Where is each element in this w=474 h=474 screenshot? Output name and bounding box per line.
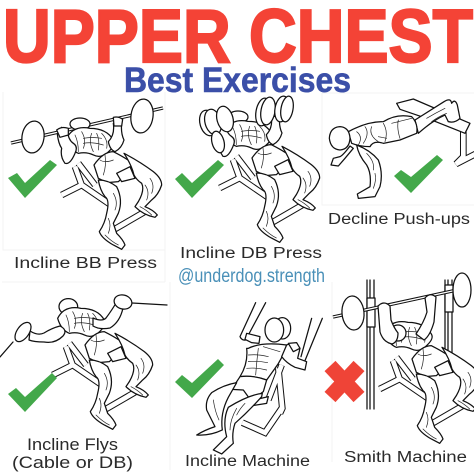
label: Decline Push-ups [328, 211, 470, 228]
illustration: smith machine press [333, 273, 474, 443]
subtitle: Best Exercises [124, 61, 351, 100]
panel: incline dumbbell press [175, 95, 325, 287]
label: Smith Machine [344, 449, 467, 466]
panel: incline barbell press [8, 98, 163, 272]
illustration: lifter with dumbbells [197, 95, 320, 242]
panel: smith machine [330, 273, 474, 466]
icon: green check [8, 373, 57, 412]
label: (Cable or DB) [12, 454, 133, 472]
icon: green check [175, 359, 224, 398]
watermark handle: @underdog.strength [178, 266, 325, 287]
icon: red cross [330, 366, 359, 397]
icon: green check [175, 160, 224, 198]
panel: decline push-ups [328, 99, 474, 228]
illustration: seated incline press [197, 303, 322, 454]
icon: green check [394, 155, 443, 193]
label [12, 436, 133, 472]
illustration: lifter with cables [0, 293, 167, 429]
label: Incline Machine [185, 453, 310, 470]
illustration: push-up on bench [329, 99, 474, 198]
label: Incline BB Press [14, 255, 157, 272]
illustration: lifter with barbell [11, 98, 163, 249]
panel: incline machine [175, 303, 322, 470]
label: Incline Flys [27, 436, 118, 454]
icon: green check [8, 160, 57, 198]
label: Incline DB Press [180, 245, 322, 262]
panel: incline flys [0, 293, 167, 472]
